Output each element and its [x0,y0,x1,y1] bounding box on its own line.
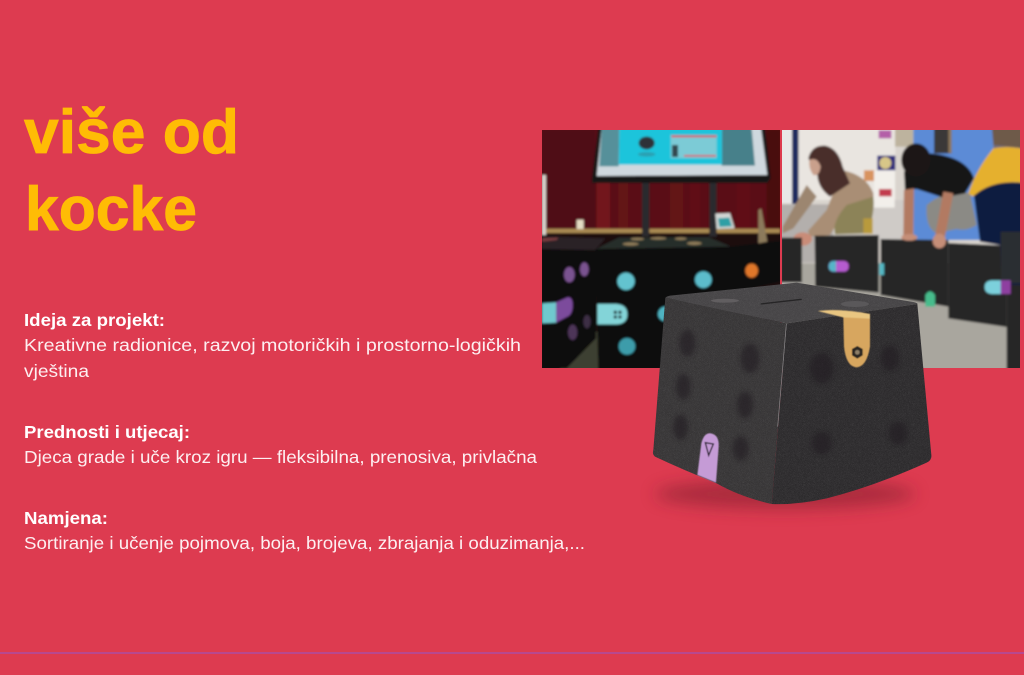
left die [542,236,605,368]
product: cube shadow [655,479,915,509]
photo: classroom screen with dice [542,130,780,368]
cup [577,220,584,229]
posters [864,130,895,208]
title [24,98,239,244]
text block: prednosti i utjecaj: Djeca grade i uče kroz igru — fleksibilna, prenosiva, privlačna [24,447,537,467]
tablet [715,213,735,229]
top details [711,299,869,307]
cube right face [772,304,931,504]
right die [731,241,780,292]
text block: ideja za projekt: Ideja za projekt: [24,310,165,330]
title: više od [24,98,239,167]
icon: lilac tab [697,433,719,483]
shelf [546,229,780,233]
text block: prednosti i utjecaj [24,422,537,467]
corner highlight [778,324,786,427]
black dice row [780,235,1023,372]
dice tabs [829,261,1011,307]
text block: prednosti i utjecaj: Prednosti i utjecaj: [24,422,190,442]
footer line [0,652,1024,654]
text block: namjena: Sortiranje i učenje pojmova, boja, brojeva, zbrajanja i oduzimanja,... [24,533,585,553]
photo: children climbing on dice [777,122,1024,375]
center die [595,237,731,372]
product: foam cube [653,283,931,504]
curtain backdrop [542,130,780,368]
title: kocke [25,175,197,244]
text block: namjena: Namjena: [24,508,108,528]
cube dimples [673,330,908,460]
text block: ideja za projekt: Kreativne radionice, razvoj motoričkih i prostorno-logičkih [24,335,521,355]
icon: gold tab [818,310,870,367]
boy [901,143,977,248]
floor [801,263,1024,373]
microphone [758,208,767,243]
text block: ideja za projekt [24,310,521,381]
cube left face [653,297,787,504]
text block: ideja za projekt: vještina [24,361,89,381]
room wall and window [777,122,1024,375]
child in yellow jacket [968,125,1024,285]
floor [558,330,600,368]
screen stands [642,182,717,237]
screen [592,125,771,183]
woman [783,146,874,246]
cube top face [666,283,917,323]
text block: namjena [24,508,585,553]
